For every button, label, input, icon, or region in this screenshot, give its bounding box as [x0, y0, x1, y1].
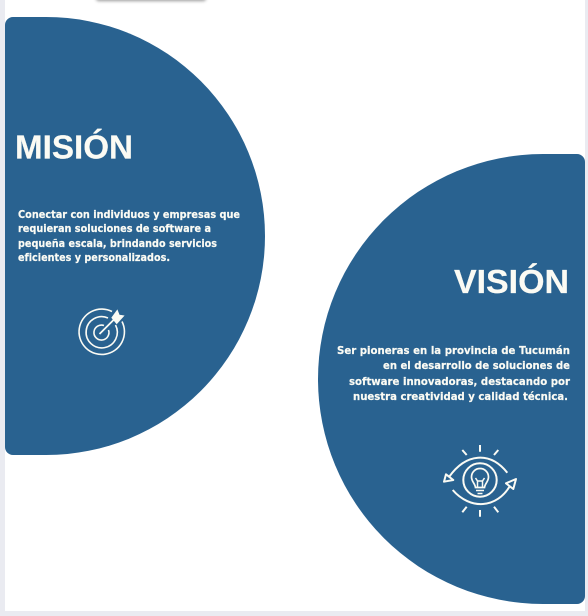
text block: visión — [337, 344, 571, 403]
panel: misión — [5, 17, 265, 455]
text block: visión: software innovadoras, destacando por — [349, 375, 571, 388]
semicircle background: visión — [318, 154, 585, 604]
text block: misión: Conectar con individuos y empresas que — [18, 208, 240, 221]
text block: misión: pequeña escala, brindando servicios — [18, 237, 217, 250]
icon: eye with light bulb — [444, 445, 516, 517]
icon: target with arrow — [79, 309, 124, 354]
semicircle background: misión — [5, 17, 265, 455]
heading: visión: VISIÓN — [454, 263, 569, 301]
panel: visión — [318, 154, 585, 604]
text block: misión — [18, 208, 240, 264]
text block: misión: eficientes y personalizados. — [18, 251, 170, 264]
text block: visión: nuestra creatividad y calidad técnica. — [353, 390, 568, 403]
text block: visión: Ser pioneras en la provincia de Tucumán — [337, 344, 570, 357]
text block: visión: en el desarrollo de soluciones de — [383, 359, 570, 372]
heading: misión: MISIÓN — [15, 128, 133, 166]
text block: misión: requieran soluciones de software a — [18, 222, 211, 235]
